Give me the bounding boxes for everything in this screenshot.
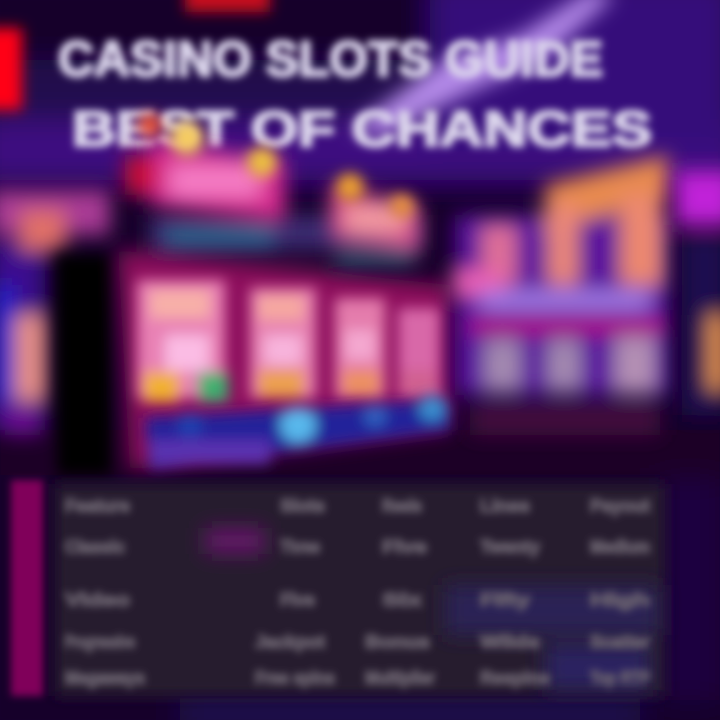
table text: Free spins (255, 668, 335, 688)
table text: Multiplier (365, 668, 435, 688)
table text: Five (382, 537, 427, 557)
title: BEST OF CHANCES (72, 101, 652, 157)
table text (65, 496, 650, 688)
table text: Scatter (590, 632, 650, 652)
center machine frame (118, 215, 450, 470)
table text: Megaways (65, 668, 145, 688)
magenta sidebar (11, 480, 43, 696)
red glow top left (0, 0, 270, 110)
table text: Feature (65, 496, 130, 516)
lightning streak (350, 0, 615, 135)
table text: Classic (65, 537, 125, 557)
table text: Respins (480, 668, 550, 688)
table text: Three (280, 537, 320, 557)
left machine (0, 190, 110, 435)
right machine (452, 155, 670, 435)
table text: Bonus (365, 632, 430, 652)
table text: Lines (480, 496, 530, 516)
center reels (137, 280, 440, 402)
table cell tints (205, 528, 660, 690)
table text: Fifty (480, 590, 530, 610)
right edge glow (675, 170, 720, 415)
table panel (55, 484, 665, 696)
title: CASINO SLOTS GUIDE (58, 31, 603, 87)
table text: Twenty (480, 537, 540, 557)
table text: Video (65, 590, 130, 610)
table text: Wilds (480, 632, 540, 652)
blue lower strip (145, 395, 450, 470)
table text: Medium (590, 537, 650, 557)
table text: Top RTP (590, 668, 650, 688)
table text: Slots (280, 496, 325, 516)
table text: Five (280, 590, 315, 610)
table text: Progressive (65, 632, 135, 652)
table text: High (590, 590, 650, 610)
black column (57, 255, 111, 475)
table text: Six (382, 590, 422, 610)
table text: Reels (382, 496, 422, 516)
table text: Payout (590, 496, 650, 516)
top machine displays (125, 113, 420, 264)
table text: Jackpot (255, 632, 325, 652)
title (58, 31, 652, 157)
comparison table (11, 480, 665, 696)
